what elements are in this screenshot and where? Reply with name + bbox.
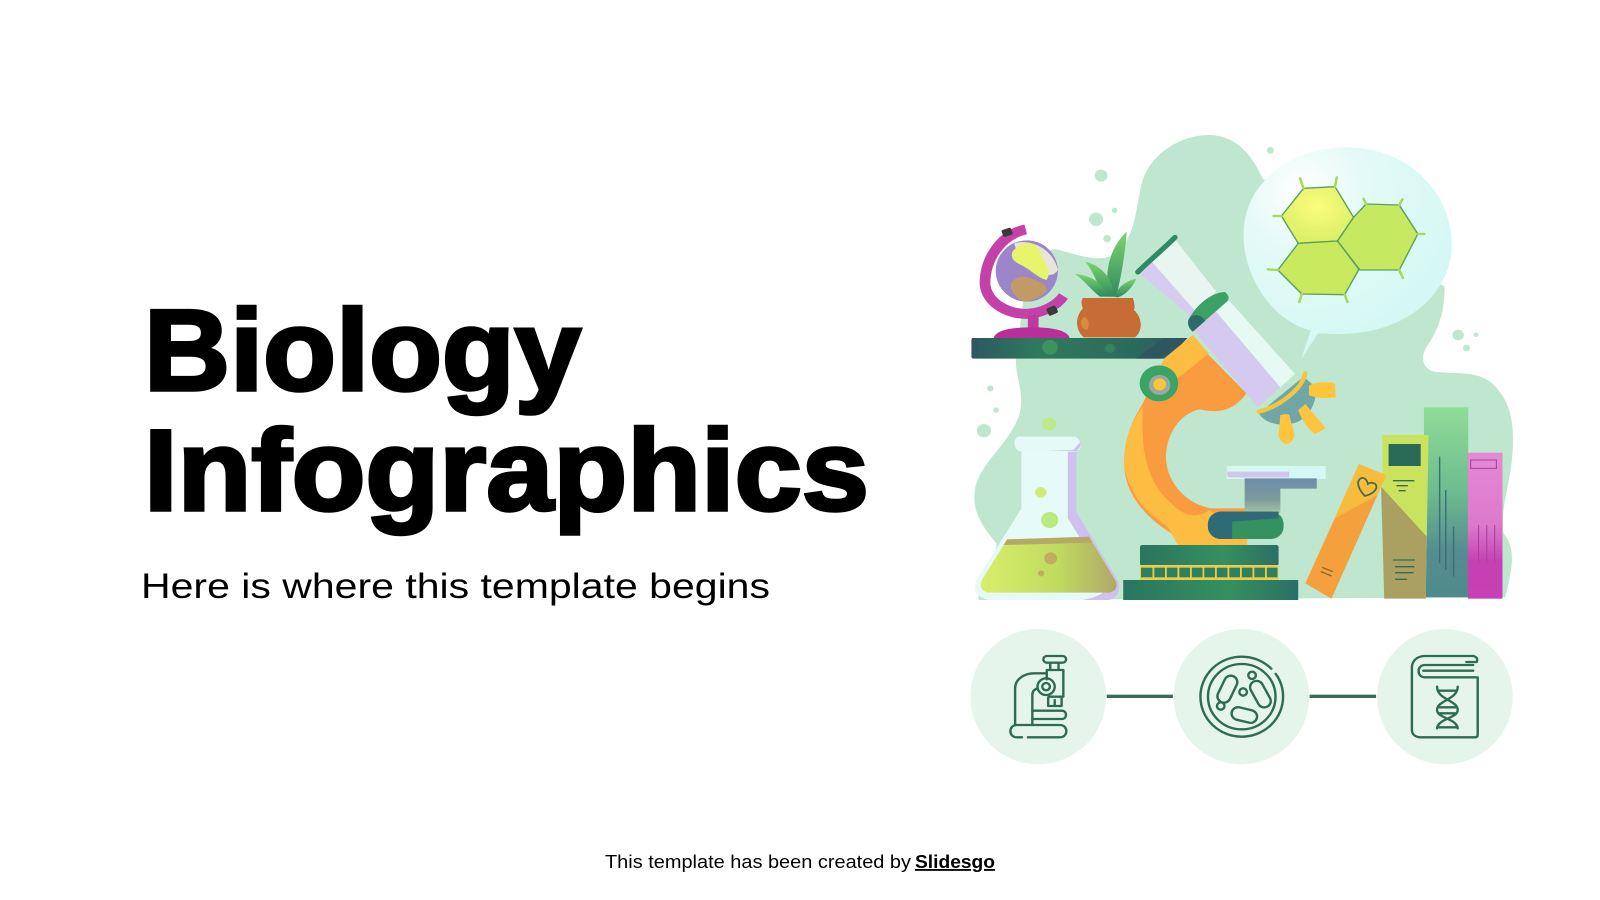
speech bubble with hexagon molecule bbox=[1244, 147, 1452, 359]
globe bbox=[985, 227, 1070, 338]
icon row bbox=[970, 629, 1513, 764]
focus knob bbox=[1140, 365, 1178, 401]
book: lime and olive bbox=[1382, 435, 1429, 598]
title line: Infographics: Infographics bbox=[144, 407, 869, 535]
tube collar bbox=[1188, 292, 1229, 332]
microscope base bbox=[1123, 545, 1298, 600]
footer text: This template has been created by bbox=[605, 851, 912, 872]
microscope arm bbox=[1124, 335, 1247, 546]
footer link: Slidesgo: Slidesgo bbox=[915, 851, 995, 872]
coarse adjustment bbox=[1208, 512, 1284, 539]
objective lenses bbox=[1309, 382, 1336, 398]
icon circle: petri dish bbox=[1174, 629, 1309, 764]
book: pink bbox=[1468, 453, 1502, 599]
potted plant bbox=[1075, 232, 1141, 337]
background blob bbox=[974, 135, 1513, 600]
flask bbox=[975, 417, 1119, 600]
floating bubbles bbox=[977, 147, 1479, 437]
stage bbox=[1227, 466, 1326, 479]
eyepiece tube bbox=[1140, 239, 1216, 317]
subtitle: Here is where this template begins bbox=[141, 567, 770, 606]
icon circle: microscope bbox=[970, 629, 1106, 764]
book: tall green bbox=[1424, 407, 1468, 597]
stage support bbox=[1245, 478, 1317, 513]
footer credit bbox=[605, 851, 995, 872]
connector line 2 bbox=[1310, 695, 1376, 698]
title line: Biology: Biology bbox=[144, 287, 581, 415]
nosepiece bbox=[1259, 377, 1316, 425]
shelf bbox=[971, 338, 1187, 359]
book: leaning yellow bbox=[1305, 464, 1386, 599]
icon circle: DNA book bbox=[1377, 629, 1513, 764]
main tube bbox=[1194, 300, 1295, 407]
microscope bbox=[1123, 237, 1336, 600]
title bbox=[144, 287, 869, 535]
books bbox=[1305, 407, 1502, 599]
illustration: biology lab still life bbox=[971, 135, 1513, 600]
connector line 1 bbox=[1107, 695, 1173, 698]
